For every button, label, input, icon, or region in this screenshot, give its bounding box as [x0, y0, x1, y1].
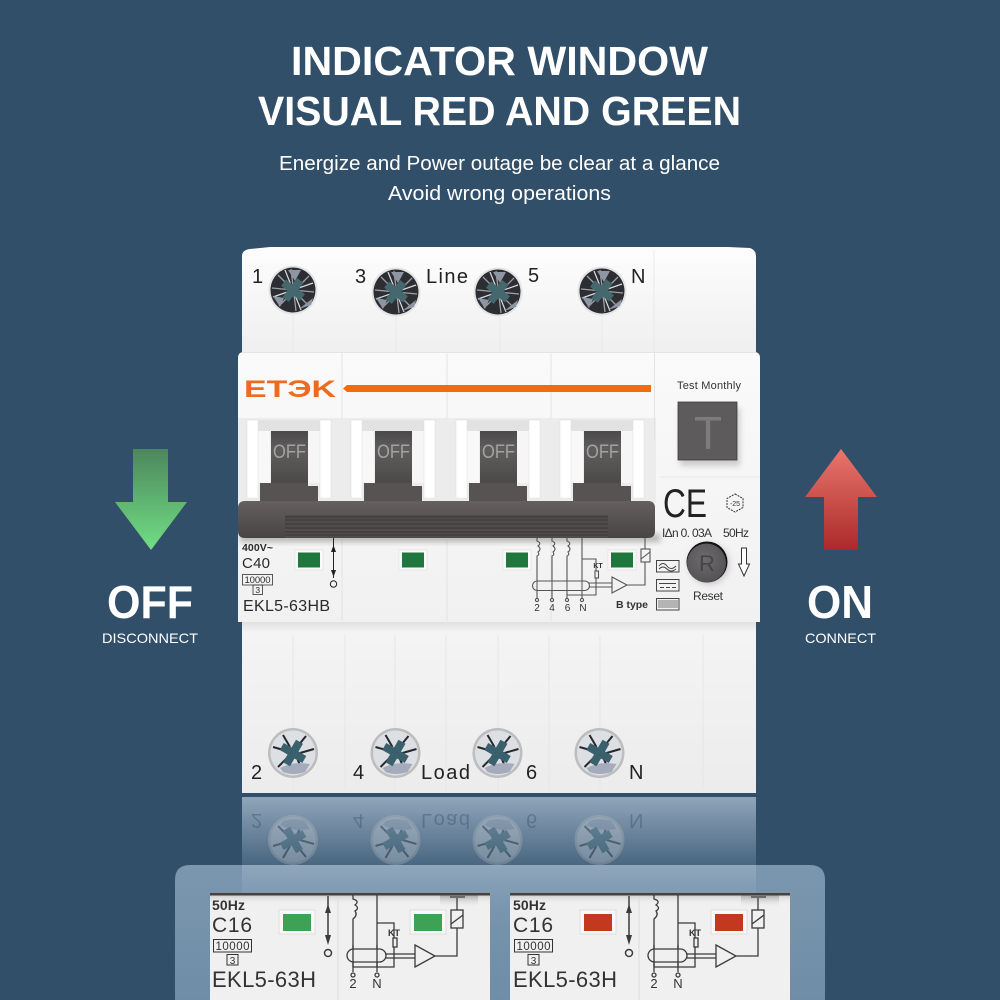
- inset ratings text: 50Hz: [513, 897, 546, 913]
- panel: status comparison: [175, 865, 825, 1000]
- circuit terminal labels: N: [579, 603, 587, 614]
- red indicator windows: [580, 910, 747, 934]
- reset button: [686, 542, 730, 585]
- load terminal labels: N: [629, 762, 643, 784]
- inset ratings text: C16: [212, 914, 252, 937]
- icon: residual current waveforms: [656, 560, 679, 610]
- rating text block: [242, 542, 330, 615]
- inset terminal labels: [650, 928, 701, 991]
- title: INDICATOR WINDOW: [291, 38, 708, 84]
- inset terminal labels: N: [372, 976, 382, 991]
- on label: ON: [807, 576, 873, 628]
- icon: line terminal screws: [268, 266, 626, 316]
- circuit terminal labels: KT: [593, 563, 603, 570]
- subtitle: [279, 153, 720, 205]
- inset: on state red indicator: [510, 893, 790, 1000]
- green indicator windows: [295, 550, 636, 570]
- reflection of breaker: 4: [353, 809, 364, 831]
- reflection of breaker: [242, 797, 756, 872]
- inset ratings text: C16: [513, 914, 553, 937]
- off label: OFF: [107, 576, 193, 628]
- circuit terminal labels: 2: [534, 603, 540, 614]
- inset terminal labels: 2: [349, 976, 357, 991]
- line terminal labels: 1: [252, 266, 263, 288]
- rating text block: EKL5-63HB: [243, 598, 330, 615]
- handle bar shadow: [240, 534, 660, 542]
- on label: CONNECT: [805, 630, 876, 646]
- load terminal labels: 2: [251, 762, 262, 784]
- logo: ETЭK: [244, 376, 337, 403]
- icon: reset direction arrow: [738, 548, 750, 576]
- inset circuit diagram: [626, 895, 766, 977]
- inset ratings text: 50Hz: [212, 897, 245, 913]
- title: VISUAL RED AND GREEN: [258, 88, 741, 134]
- breaker main body: [238, 352, 760, 622]
- inset: off state green indicator: [210, 893, 490, 1000]
- inset ratings text: 3: [531, 956, 537, 967]
- inset ratings text: [513, 897, 617, 992]
- circuit terminal labels: [534, 563, 603, 614]
- inset ratings text: 3: [230, 956, 236, 967]
- icon: temperature rating: -25: [730, 501, 740, 508]
- reset label: Reset: [693, 589, 724, 603]
- line terminal labels: N: [631, 266, 645, 288]
- inset ratings text: [212, 897, 316, 992]
- title: [258, 38, 741, 134]
- inset circuit diagram: [324, 895, 465, 977]
- inset ratings text: EKL5-63H: [212, 967, 316, 992]
- arrow: off direction: [115, 449, 187, 550]
- load terminal labels: [251, 762, 643, 784]
- circuit terminal labels: 6: [565, 603, 571, 614]
- rating text block: 400V~: [242, 542, 273, 554]
- subtitle: Energize and Power outage be clear at a glance: [279, 153, 720, 175]
- inset terminal labels: KT: [388, 928, 400, 938]
- breaker upper terminal block: [242, 247, 756, 354]
- inset ratings text: EKL5-63H: [513, 967, 617, 992]
- load terminal labels: 6: [526, 762, 537, 784]
- off label: DISCONNECT: [102, 630, 198, 646]
- circuit terminal labels: 4: [549, 603, 555, 614]
- rating labels: 50Hz: [723, 526, 749, 540]
- green indicator windows: [279, 910, 446, 934]
- toggle switches: [247, 420, 644, 501]
- load terminal labels: Load: [421, 762, 470, 784]
- subtitle: Avoid wrong operations: [388, 183, 611, 205]
- reflection of breaker: N: [629, 809, 643, 831]
- icon: temperature rating: [727, 494, 743, 512]
- inset terminal labels: N: [673, 976, 683, 991]
- line terminal labels: [252, 265, 645, 288]
- rating text block: C40: [242, 555, 270, 572]
- line terminal labels: 3: [355, 266, 366, 288]
- line terminal labels: 5: [528, 265, 539, 287]
- rating labels: IΔn 0. 03A: [662, 526, 712, 540]
- b type label: B type: [616, 599, 648, 611]
- reflection of breaker: Load: [421, 809, 470, 831]
- orange stripe: [343, 385, 651, 392]
- inset ratings text: 10000: [516, 941, 550, 953]
- test monthly label: Test Monthly: [677, 380, 742, 392]
- test button: [678, 402, 740, 466]
- inset ratings text: 10000: [216, 941, 250, 953]
- inset terminal labels: [349, 928, 400, 991]
- test button: T: [694, 407, 722, 459]
- load terminal labels: 4: [353, 762, 364, 784]
- handle bar: [238, 501, 655, 538]
- breaker lower terminal block: [242, 620, 756, 793]
- reset button: R: [699, 551, 715, 576]
- rating text block: 3: [255, 585, 260, 595]
- reflection of breaker: 2: [251, 809, 262, 831]
- line terminal labels: Line: [426, 266, 468, 288]
- arrow: on direction: [805, 449, 877, 550]
- reflection of breaker: 6: [526, 809, 537, 831]
- CE mark: CE: [663, 482, 707, 526]
- inset terminal labels: 2: [650, 976, 658, 991]
- rating labels: [662, 526, 749, 540]
- rating text block: 10000: [244, 575, 270, 586]
- circuit diagram: [532, 538, 650, 602]
- icon: contact travel arrow: [330, 538, 337, 587]
- inset terminal labels: KT: [689, 928, 701, 938]
- icon: load terminal screws: [268, 728, 624, 778]
